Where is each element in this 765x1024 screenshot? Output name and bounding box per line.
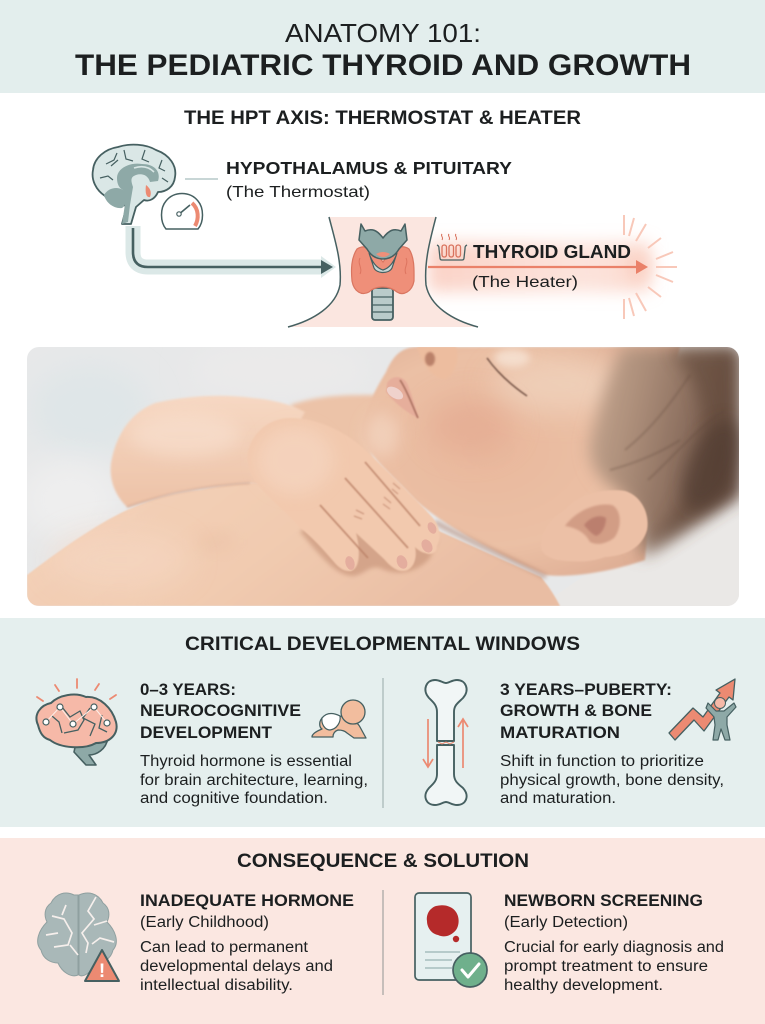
label: thyroid gland: (The Heater) [472,274,578,291]
label: 0-3 years: DEVELOPMENT [140,723,273,742]
label: inadequate hormone [140,891,354,931]
icon: thyroid gland [352,224,414,320]
diagram: HPT axis [93,145,677,327]
label: 0-3 years: NEUROCOGNITIVE [140,701,301,720]
body text [140,939,333,994]
body text [140,753,368,807]
label: 3 years-puberty: 3 YEARS–PUBERTY: [500,680,672,699]
fingernails [345,556,355,570]
header band [0,0,765,93]
icon: damaged brain with warning [38,893,119,982]
label: 3 years-puberty: MATURATION [500,723,620,742]
lips [386,377,416,416]
body text: physical growth, bone density, [500,772,724,789]
body text: and maturation. [500,790,616,807]
label: 0-3 years [140,680,301,742]
label: thyroid gland: THYROID GLAND [473,241,631,262]
divider [382,890,384,995]
label: thyroid gland [472,241,631,291]
body text: Shift in function to prioritize [500,753,704,770]
photo: sleeping newborn with hand on neck [20,340,754,606]
icon: damaged brain with warning: ! [99,961,105,982]
heading: CRITICAL DEVELOPMENTAL WINDOWS [185,634,580,655]
label: inadequate hormone: INADEQUATE HORMONE [140,891,354,910]
title line 1: ANATOMY 101: [285,18,481,48]
icon: heater [437,234,467,260]
icon: thermostat gauge [162,194,202,229]
label: hypothalamus and pituitary [226,158,512,201]
icon: brain with pituitary [93,145,175,224]
sunburst rays [624,215,677,319]
heat glow behind arrow [428,242,654,292]
face and neck [362,347,680,576]
nose [417,347,456,348]
label: inadequate hormone: (Early Childhood) [140,914,269,931]
label: hypothalamus and pituitary: (The Thermostat) [226,184,370,201]
label: 0-3 years: 0–3 YEARS: [140,680,236,699]
body text: Crucial for early diagnosis and [504,939,724,956]
label: hypothalamus and pituitary: HYPOTHALAMUS & PITUITARY [226,158,512,178]
body text: Thyroid hormone is essential [140,753,352,770]
body text [500,753,724,807]
label: 3 years-puberty: GROWTH & BONE [500,701,652,720]
arm [111,396,305,507]
icon: bone [423,680,468,805]
label: newborn screening [504,891,703,931]
body text: and cognitive foundation. [140,790,328,807]
divider [382,678,384,808]
heading: CONSEQUENCE & SOLUTION [237,851,529,872]
shadow under hand [300,530,433,578]
body text: for brain architecture, learning, [140,772,368,789]
body text: intellectual disability. [140,977,293,994]
shoulder and chest [27,483,560,606]
finger separators [320,462,420,558]
hand and fingers [247,418,440,571]
label: newborn screening: (Early Detection) [504,914,628,931]
panel: consequence and solution [0,838,765,1024]
title line 2: THE PEDIATRIC THYROID AND GROWTH [75,49,691,82]
icon: brain with network [36,679,117,765]
arrow from thyroid [428,260,648,274]
icon: blood spot card with check [415,893,487,987]
body text [504,939,724,994]
skin between arm and chin [290,392,374,458]
neck [288,217,478,327]
connector line [185,178,218,180]
body text: Can lead to permanent [140,939,309,956]
panel: critical developmental windows [0,618,765,827]
label: newborn screening: NEWBORN SCREENING [504,891,703,910]
body text: developmental delays and [140,958,333,975]
ear [562,490,648,561]
icon: growth arrow with figure [669,679,736,740]
heading: HPT axis: THE HPT AXIS: THERMOSTAT & HEATER [184,108,581,129]
hair [589,347,754,557]
knuckle creases [354,483,400,519]
body text: healthy development. [504,977,663,994]
signal arrow from brain to thyroid [133,226,336,278]
body text: prompt treatment to ensure [504,958,708,975]
closed eye [487,358,527,396]
sheet [540,490,739,606]
icon: crawling baby [312,700,366,738]
label: 3 years-puberty [500,680,672,742]
